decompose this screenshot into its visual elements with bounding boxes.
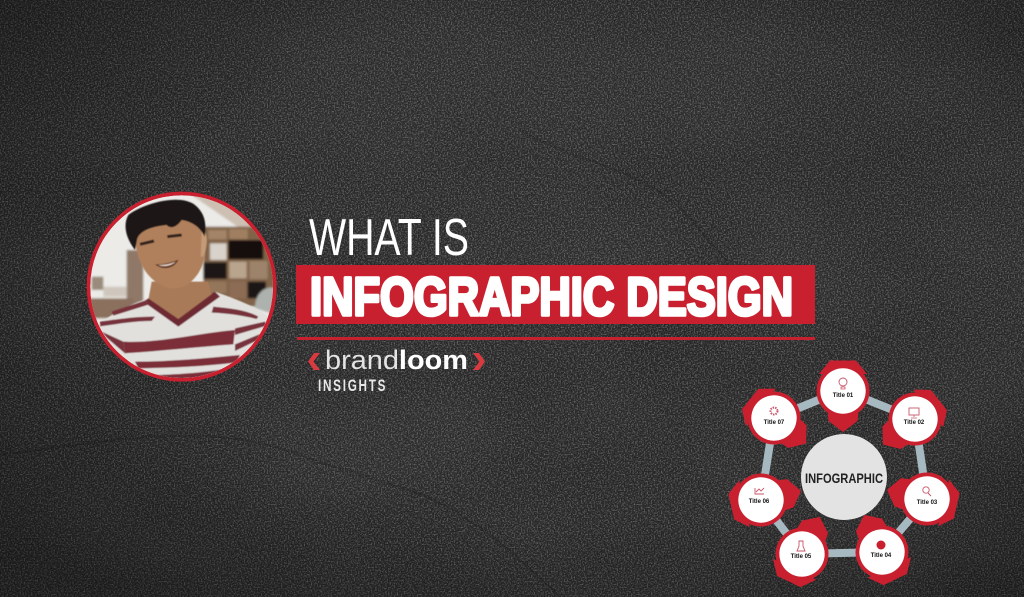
node: title 04 [840, 504, 919, 591]
heading: what is: WHAT IS [309, 209, 469, 267]
node: title 04: Title 04 [871, 553, 892, 559]
node: title 02: Title 02 [904, 420, 925, 426]
red title bar [296, 265, 815, 324]
face [135, 217, 206, 288]
center circle [801, 434, 887, 520]
node: title 06: Title 06 [749, 499, 770, 505]
connector ring [761, 390, 927, 554]
insights label: INSIGHTS [318, 377, 387, 396]
hair [126, 200, 205, 250]
brandloom logo [308, 345, 485, 396]
right chevron [473, 353, 485, 370]
node: title 03 [881, 464, 963, 532]
node: title 02 [866, 379, 955, 465]
neck [148, 282, 212, 322]
node: title 05 [765, 506, 844, 593]
infographic wheel diagram [725, 360, 963, 593]
node: title 07: Title 07 [764, 420, 785, 426]
red underline [297, 337, 815, 340]
node: title 06 [725, 465, 807, 533]
node: title 05: Title 05 [791, 554, 812, 560]
heading: infographic design: INFOGRAPHIC DESIGN [310, 267, 793, 327]
wordmark: brandloom [325, 345, 468, 375]
title [296, 209, 815, 340]
node: title 01 [816, 360, 870, 432]
shirt [98, 291, 268, 376]
node: title 07 [734, 378, 823, 464]
center circle: INFOGRAPHIC [805, 470, 883, 486]
portrait photo in red circle [86, 192, 277, 382]
node: title 03: Title 03 [917, 500, 938, 506]
node: title 01: Title 01 [833, 393, 854, 399]
left chevron [308, 353, 320, 370]
